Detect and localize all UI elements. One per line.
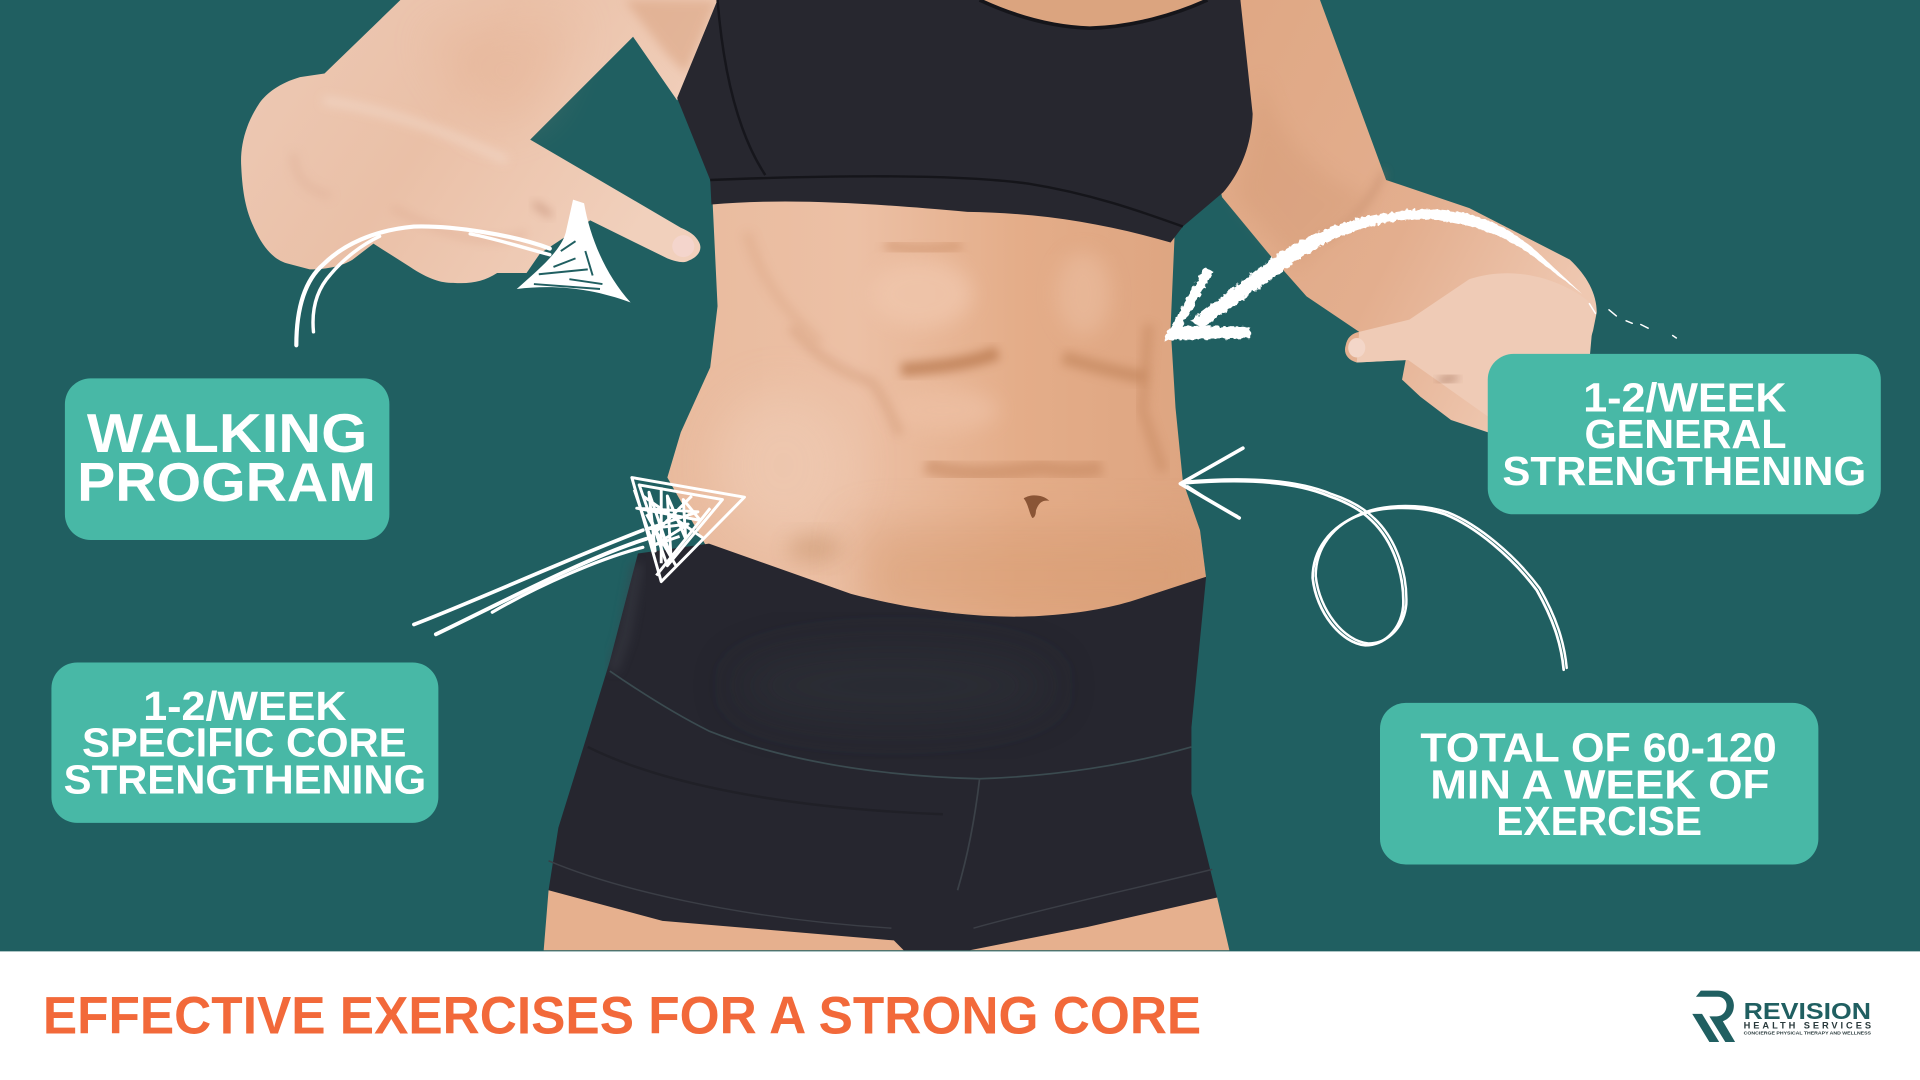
callout: walking program: WALKING	[87, 402, 367, 464]
callout: specific core strengthening: STRENGTHENING	[64, 756, 426, 802]
callout: specific core strengthening: 1-2/WEEK	[143, 683, 347, 729]
black sports bra	[677, 0, 1253, 242]
arrow: specific core strengthening	[414, 478, 744, 634]
navel	[1024, 495, 1049, 518]
right arm and pointing hand	[1206, 0, 1597, 441]
callout: total weekly exercise: EXERCISE	[1496, 798, 1702, 844]
callout: walking program: PROGRAM	[77, 451, 376, 513]
callout: total weekly exercise	[1380, 703, 1818, 864]
chest skin above the bra	[980, 0, 1207, 28]
footer band	[0, 951, 1920, 1080]
bare midriff with abdominal muscles	[667, 178, 1212, 624]
callout: general strengthening: GENERAL	[1584, 411, 1787, 457]
callout: general strengthening: 1-2/WEEK	[1583, 374, 1787, 420]
callout: total weekly exercise: TOTAL OF 60-120	[1420, 725, 1777, 771]
thighs below the shorts	[544, 890, 1229, 950]
title: EFFECTIVE EXERCISES FOR A STRONG CORE	[43, 986, 1201, 1045]
photo: athlete pointing at her core	[241, 0, 1597, 950]
logo mark	[1692, 991, 1735, 1042]
callout: walking program	[65, 378, 389, 540]
black shorts	[549, 544, 1217, 950]
arrow: walking program	[296, 200, 631, 345]
callout: specific core strengthening: SPECIFIC CORE	[82, 720, 407, 766]
logo: Revision Health Services	[1692, 991, 1871, 1042]
logo: Revision Health Services: CONCIERGE PHYSICAL THERAPY AND WELLNESS	[1744, 1031, 1871, 1036]
callout: general strengthening: STRENGTHENING	[1502, 448, 1866, 494]
logo: Revision Health Services: HEALTH SERVICES	[1744, 1021, 1871, 1031]
logo: Revision Health Services: REVISION	[1744, 998, 1871, 1024]
callout: total weekly exercise: MIN A WEEK OF	[1430, 761, 1769, 807]
callout: specific core strengthening	[51, 662, 438, 823]
left arm and pointing hand	[241, 0, 718, 283]
arrow: total exercise loop	[1180, 448, 1567, 670]
callout: general strengthening	[1488, 354, 1881, 514]
arrow: general strengthening	[1163, 209, 1676, 340]
